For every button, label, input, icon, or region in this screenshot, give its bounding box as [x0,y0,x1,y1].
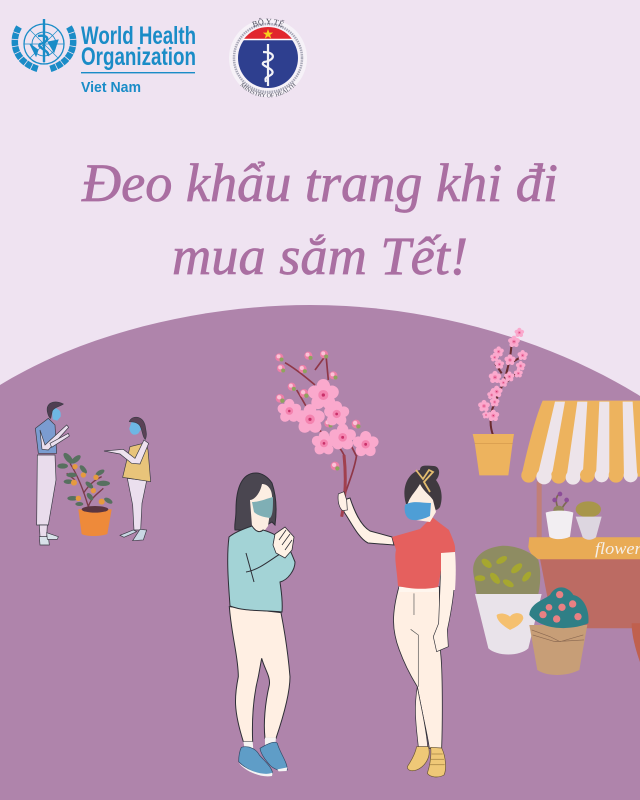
blossom branch [275,350,380,517]
stall post [537,482,542,538]
orange pot [78,509,112,536]
background hill [0,305,640,800]
hanging arm upper [441,552,456,590]
buds [275,350,361,471]
large white pot plant [473,546,542,655]
woman with teal sweater [228,473,295,776]
potted blossom tree [473,328,528,475]
woman in yellow [104,417,151,541]
mask [252,497,273,518]
icon: staff and serpent [263,44,273,86]
WHO logo [15,19,196,96]
raised arm [344,498,394,545]
logo text: MINISTRY OF HEALTH: MINISTRY OF HEALTH [240,82,296,98]
small scene: couple with kumquat tree [35,402,151,545]
socks [243,738,276,750]
hair [235,473,276,530]
rose pot [529,587,589,675]
logo text: World Health: World Health [81,22,196,50]
legs [229,607,290,776]
logo text: BỘ Y TẾ: BỘ Y TẾ [252,18,284,27]
face and neck [250,484,272,534]
title line 1: Đeo khẩu trang khi đi [81,153,558,213]
sweater fold [246,553,282,582]
Ministry of Health logo [229,18,307,98]
woman with red top [344,466,456,777]
hair band [416,470,433,492]
icon: WHO emblem [15,19,73,69]
kumquat tree [57,451,114,536]
right side: flower stall [473,328,640,675]
man [35,402,69,545]
praying hands [273,527,294,558]
title [81,153,558,286]
counter [528,537,640,667]
holding hand [338,492,347,511]
yellow shoes [407,747,429,771]
legs [394,570,455,777]
small white pots [546,492,602,540]
logo text: Organization: Organization [81,43,196,71]
logo text: Viet Nam: Viet Nam [81,79,141,96]
hair with bun [404,466,442,510]
branch stems [285,355,357,517]
face and neck [407,484,436,522]
icon: star [263,29,273,39]
awning [521,401,640,485]
hanging arm [433,570,455,652]
mask [405,502,431,520]
blue sneakers [239,747,273,775]
sweater [228,526,295,612]
blossoms [276,379,380,458]
title line 2: mua sắm Tết! [172,226,468,286]
counter sign: flower [595,539,640,558]
red top [392,517,455,589]
yellow pot [473,434,514,475]
